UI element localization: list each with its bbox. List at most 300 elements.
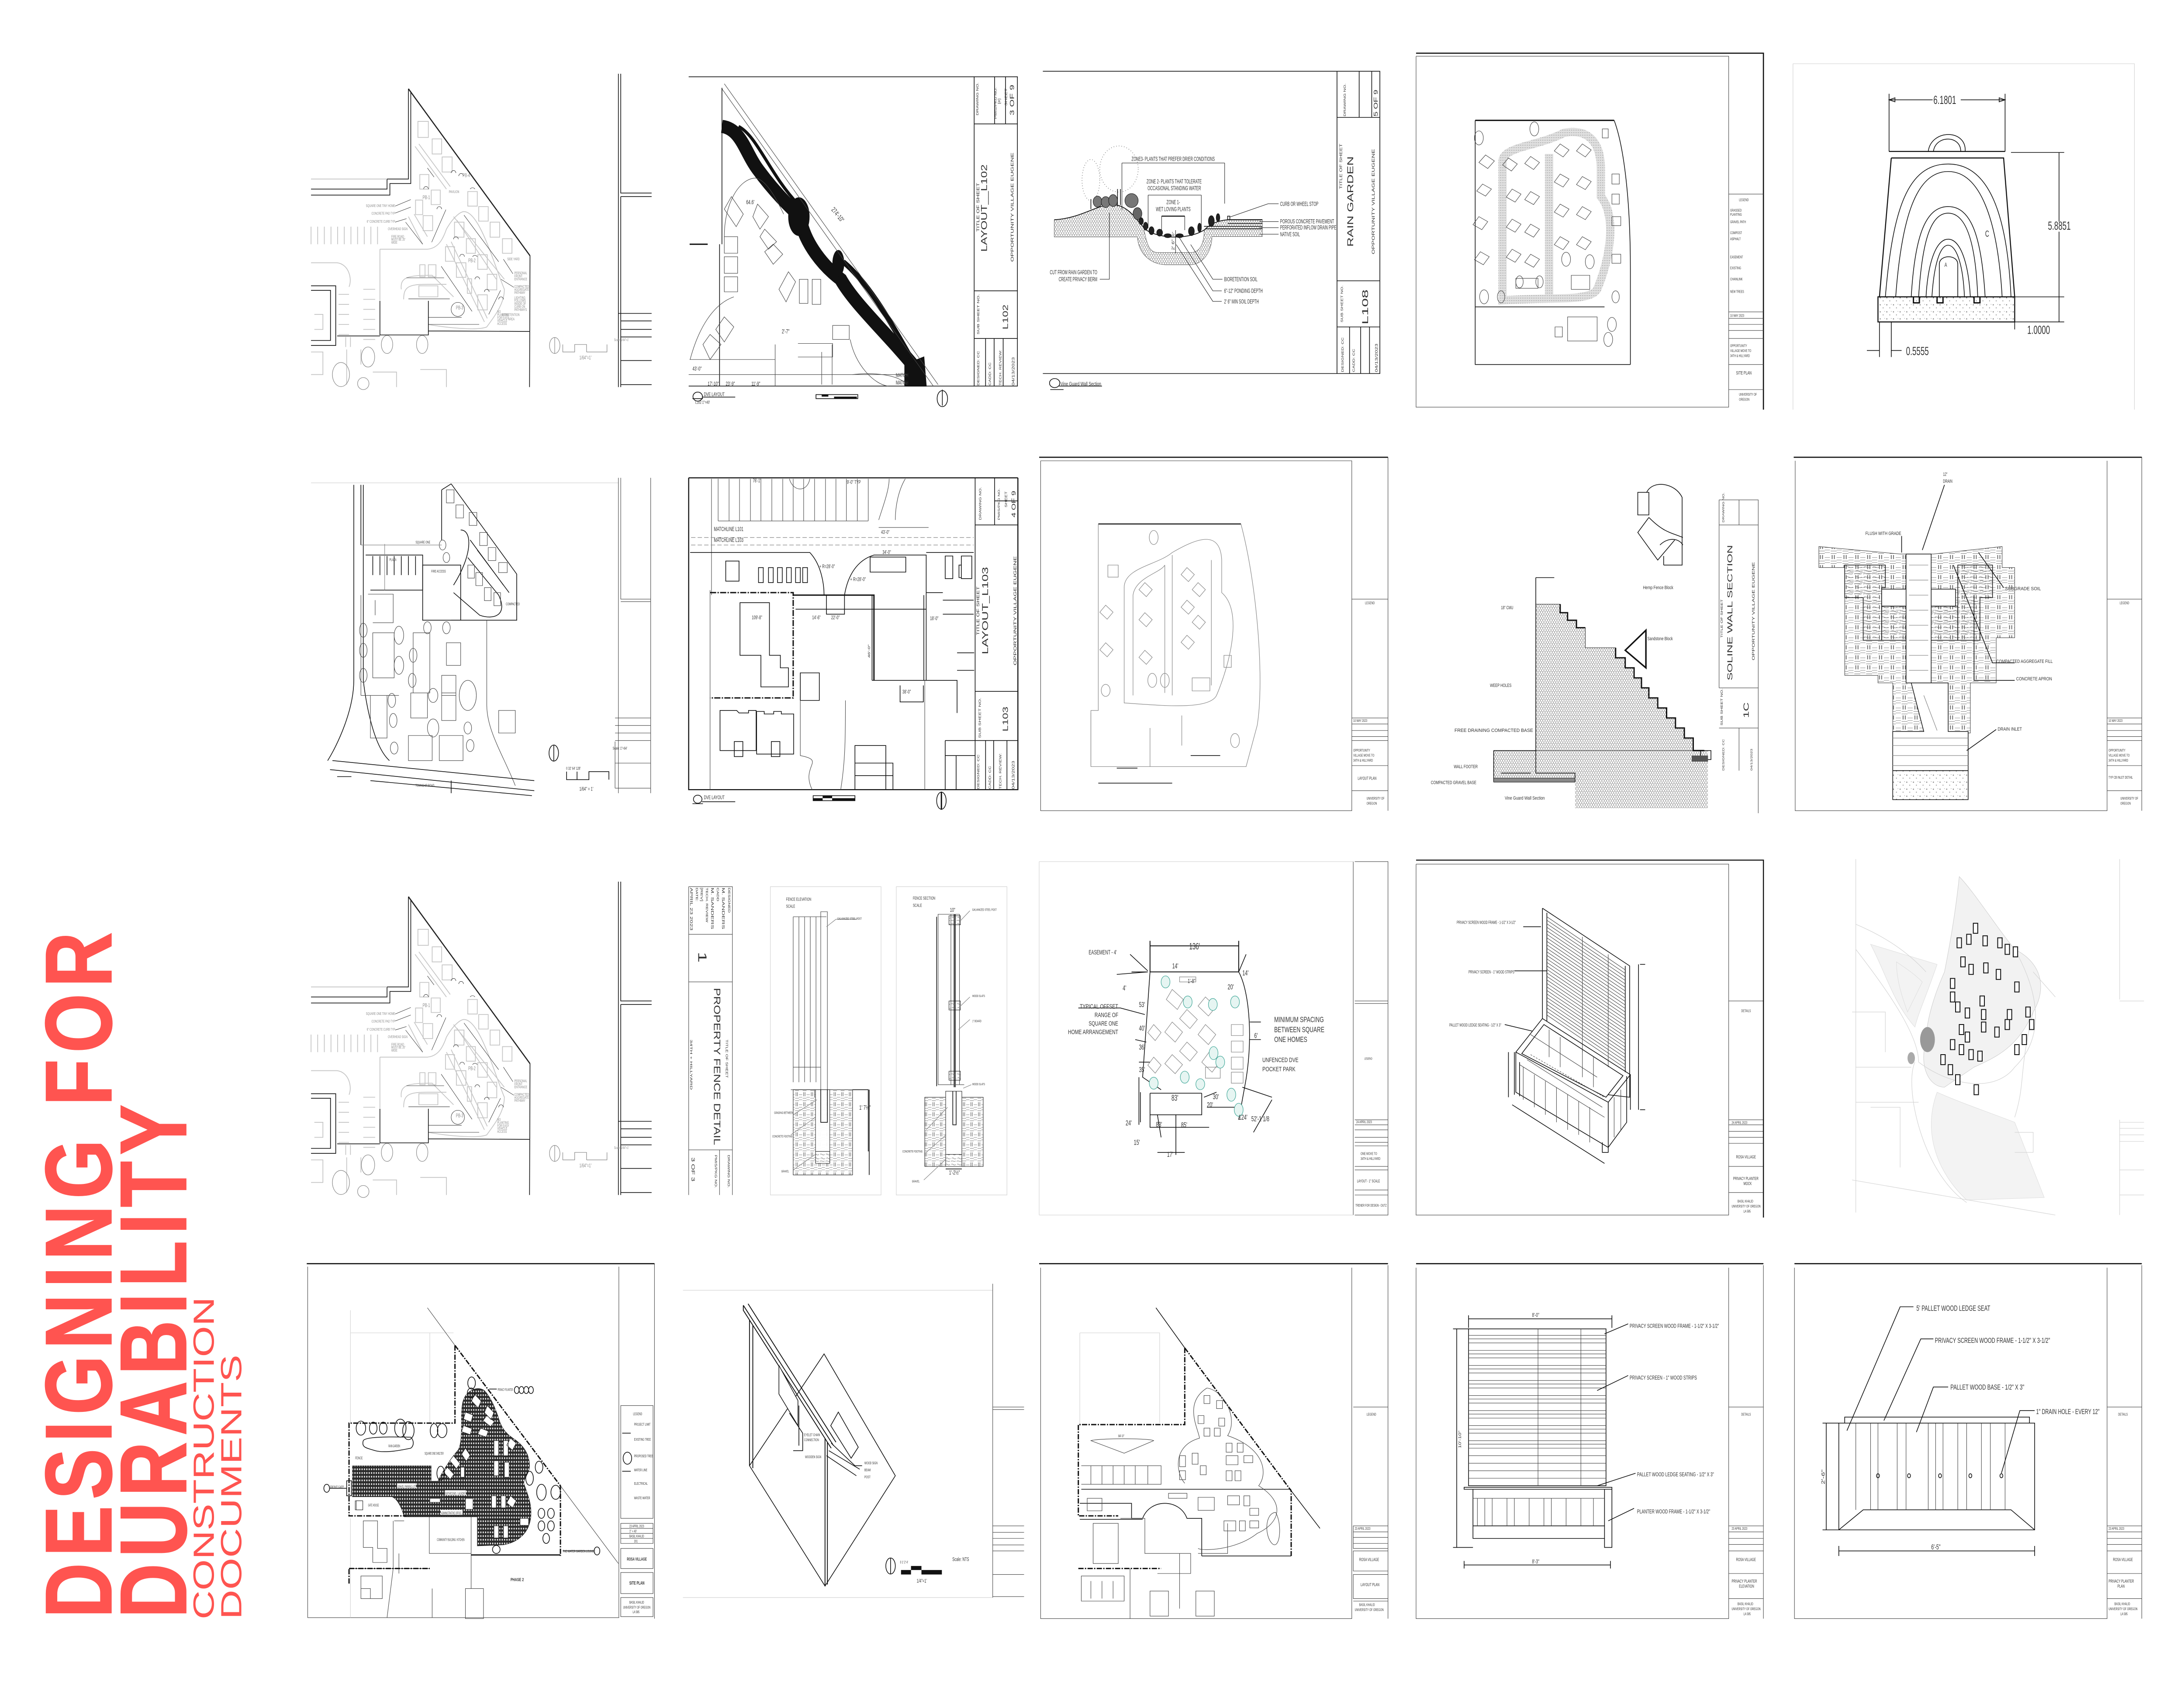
labels: PROJECT LIMIT [634,1423,650,1427]
site plan labels: PB-4 [463,173,470,179]
legend and title block [1730,198,1757,402]
text: PMIS/PKG NO. [997,488,1001,520]
parking and matchlines [718,479,868,521]
labels: SITE PLAN [629,1580,645,1586]
title block text: 34TH & HILLYARD [1353,759,1373,762]
labels: PRIVACY PLANTER [498,1388,513,1392]
site plan labels: PLANTING [497,1121,509,1125]
leaders [1902,485,2015,751]
annotations: L108 [1361,290,1370,324]
annotations: TITLE OF SHEET [1720,599,1724,638]
labels: WATER LINE [634,1469,647,1472]
sheet frame [1040,1265,1388,1618]
title block text: [REV] [700,888,703,901]
dimension labels: 53' [1139,1001,1145,1009]
annotations [1050,83,1379,387]
title block text: 34TH + HILLYARD [689,1040,693,1090]
site plan labels: FRONT [515,1082,522,1086]
site plan labels [366,173,629,361]
legend and title block: 10 MAY 2023 [1730,314,1744,318]
isometric block detail [1638,484,1683,565]
fence annotations: GALVANIZED STEEL POST [972,909,997,912]
title block text: 3 OF 3 [690,1157,696,1181]
fence elevation [771,887,881,1195]
annotations: POROUS CONCRETE PAVEMENT [1280,218,1334,225]
labels [804,1434,969,1584]
labels [1118,1412,1384,1612]
fence annotations: GRADING BETWEEN [774,1112,793,1115]
site plan labels: ENTRANCE [515,277,527,281]
dimension labels: UNFENCED DVE [1262,1056,1299,1064]
fence annotations: WOOD SLATS [972,1083,985,1086]
annotations: ROSA VILLAGE [2113,1557,2133,1562]
annotations: 8'-3" [1532,1559,1539,1565]
annotations: Vine Guard Wall Section [1061,381,1101,387]
stepped edge and wall footing [1560,604,1704,751]
privacy screen [1542,908,1630,1097]
annotations: 23 APRIL 2023 [1731,1527,1747,1531]
site plan labels: ACCESS [497,1130,507,1134]
site plan labels: FOR EASY [497,1124,509,1128]
annotations: 6'-5" [1931,1543,1941,1552]
annotations: CREATE PRIVACY BERM [1059,276,1097,283]
site plan labels: 6" CONCRETE CURB TYP [367,1028,395,1032]
fence annotations: GALVANIZED STEEL POST [837,918,862,921]
title block text: UNIVERSITY OF [1367,797,1385,801]
dimension labels: MINIMUM SPACING [1274,1015,1324,1024]
title block text: 64.6' [746,199,754,206]
labels: 23 APRIL 2023 [1355,1527,1370,1531]
subtitle line 1: CONSTRUCTION [188,1297,220,1619]
fence annotations: 1'-2½" [949,1169,960,1176]
site plan labels: INSIDE OF [515,302,526,306]
legend and title block: OPPORTUNITY [1730,344,1747,348]
scale and north arrow [549,745,609,780]
text: MATCHLINE L103 [714,537,743,544]
panel: catch basin section [1794,457,2142,811]
annotations: Vine Guard Wall Section [1505,796,1545,801]
text: 18'-0" [930,616,939,622]
labels: 1" = 40' [629,1530,637,1533]
labels: BEAM [864,1469,871,1472]
annotations: SUB SHEET NO. [1720,689,1724,725]
dimension labels: SQUARE ONE [1089,1020,1118,1027]
annotations: COMPACTED GRAVEL BASE [1431,780,1476,785]
text: 46'-0" [867,644,871,658]
site plan labels: WIDE [391,1049,397,1052]
soil section [1819,546,2015,800]
title block text: DESIGNED [727,888,731,913]
title block text: 23'-9" [726,381,735,387]
labels: ROSA VILLAGE [1359,1557,1379,1562]
title block text: CADD [716,888,719,901]
site plan labels: OVERHEAD SIGN [388,227,408,231]
sheet frame and title block [689,77,1017,386]
sheet frame [1416,864,1763,1215]
dimension labels [1068,941,1387,1207]
fence annotations: SCALE [913,903,922,908]
labels: BASIL KHALID [629,1535,644,1539]
dimensions and leaders [1822,1307,2035,1556]
annotations: PRIVACY SCREEN - 1" WOOD STRIPS [1469,969,1514,974]
legend and title block: PLANTING [1730,213,1742,217]
text: CADD: CC [988,766,992,789]
annotations: DESIGNED: CC [1341,337,1344,372]
text: + R=28'-0" [819,564,835,569]
sheet frame [1040,457,1388,811]
dimension labels: 40' [1139,1024,1145,1033]
annotations: DETAILS [2118,1412,2128,1417]
labels: ROSA VILLAGE [627,1556,647,1562]
trees [1475,122,1619,346]
site plan labels [366,1003,629,1169]
shelters [1941,923,2034,1095]
dimension values: 1.0000 [2027,324,2050,337]
legend and title block: OREGON [1739,397,1749,402]
labels: WOOD SIGN [864,1462,878,1465]
dimension labels: 24' [1126,1119,1132,1128]
fence annotations: CONCRETE FOOTING [772,1135,793,1138]
dimension labels: 14' [1242,969,1248,977]
heading line 1: DESIGNING FOR [26,926,131,1618]
dimension labels: 4' [1123,984,1126,993]
legend and title block: UNIVERSITY OF [1739,393,1757,397]
tiny homes cluster [1148,977,1243,1083]
site plan labels: PATHWAY [515,1099,525,1103]
site plan labels: Scale: 1/64"=1' [614,1146,629,1150]
site plan labels: CONCRETE PAD TYP [372,211,395,216]
labels: UNIVERSITY OF OREGON [1355,1608,1384,1612]
annotations: BASIL KHALID [1738,1602,1753,1606]
labels: COMPACTED [506,603,520,606]
title block text: DRAWING NO. [727,1155,730,1188]
site plan labels: COMPACTED [515,1093,529,1097]
annotations: OCCASIONAL STANDING WATER [1147,185,1201,192]
boundary and shelters [1475,120,1614,121]
labels: 84'-0" [1118,1434,1124,1438]
site plan labels: 1/64"=1' [580,355,591,361]
labels: WASTE WATER [634,1497,650,1501]
annotations: COMPACTED AGGREGATE FILL [1996,659,2053,664]
fence annotations: CONCRETE FOOTING [902,1150,923,1153]
dimension labels: 36' [1139,1043,1145,1052]
soil section [1054,204,1262,265]
site plan labels: CONCRETE PAD TYP [372,1019,395,1024]
annotations: DETAILS [1741,1009,1751,1013]
labels: BASIL KHALID [1359,1603,1375,1607]
sheet frame [1795,457,2142,811]
labels: 201 [634,1540,638,1543]
dimension labels: 14' [1172,962,1178,970]
dimension values: A [1945,262,1947,268]
site plan labels: COMPACTED [515,285,529,289]
annotations: VILLAGE MOVE TO [2108,753,2130,758]
legend and title block: 34TH & HILLYARD [1730,354,1750,358]
title block text: MATCH [896,380,908,386]
text: DVE LAYOUT [704,795,725,801]
fence annotations: FENCE SECTION [913,896,935,901]
dimension labels: 30' [1213,1093,1219,1101]
annotations: BIORETENTION SOIL [1224,276,1258,283]
scale bar and north arrow [692,390,947,407]
panel: site plan sheet row 2 column 1 [311,478,651,796]
site plan labels: FOR EASY [497,316,509,320]
labels: PLAZA [390,559,397,562]
site plan outline [1091,524,1260,783]
annotations: PRIVACY PLANTER [1733,1176,1759,1181]
site plan labels: PB-3 [456,1113,463,1119]
annotations: 04/13/2023 [1750,749,1753,771]
dimension labels: EASEMENT - 4' [1089,949,1117,956]
annotations [1431,493,1755,801]
panel: layout plan dark sheet [1039,1264,1388,1618]
annotations: 8'-0" [1532,1312,1539,1318]
sheet frame [1416,56,1729,407]
labels: FRONT GATE [330,1486,344,1489]
title block text: 274'-10" [830,205,846,224]
homes and building outline [1081,1439,1161,1484]
overall site linework [311,483,619,796]
labels: BATHROOMS / LAUNDRY [446,1492,466,1496]
context linework [350,1310,453,1618]
site plan labels: SIDE YARD [507,257,520,261]
dimension labels: 6' [1254,1032,1258,1040]
panel: site plan sheet row 3 column 1 [311,882,652,1197]
site plan labels: PLANTING [497,313,509,317]
labels: LEGEND [633,1412,642,1416]
annotations: 2'-6" [1821,1470,1826,1484]
site plan labels: MUST BE 20' [391,1045,405,1050]
panel: wall section [1431,484,1758,813]
annotations: OPPORTUNITY [2108,749,2125,752]
title block text [689,888,731,1188]
legend and title block: CHAINLINK [1730,277,1743,281]
annotations: 04/13/2023 [1375,344,1379,372]
sheet frame and title block [1043,71,1380,373]
annotations: 18" CMU [1501,605,1513,610]
dimension labels: 24 APRIL 2023 [1356,1120,1372,1125]
dimension lines [1867,94,2064,357]
shelters on hatch [356,1394,529,1538]
labels: 1/64" = 1' [580,787,593,792]
annotations: 1C [1742,702,1750,718]
title block linework [615,478,651,793]
panel: arch raised bed dimensions [1793,64,2134,410]
dimension labels: 17' [1167,1151,1173,1159]
annotations: TITLE OF SHEET [1339,144,1343,189]
annotations: SUB SHEET NO. [1340,286,1344,322]
text: 22'-0" [831,615,840,621]
labels: FIRE ACCESS [431,570,446,574]
trees [356,1377,560,1553]
title block text: LEGEND [1365,601,1375,605]
site plan labels: SQUARE ONE TINY HOME [366,204,395,208]
fence annotations: 10" [950,907,955,913]
legend and title block: EXISTING [1730,266,1741,270]
annotations: 6" [1172,232,1175,236]
site plan labels: PATHWAYS [515,308,527,312]
title block text: LAYOUT__L102 [980,164,989,252]
text: 43'-0" [881,530,890,535]
annotations: LEGEND [2120,601,2129,605]
title block text: OPPORTUNITY [1353,749,1370,752]
faint frame and title block [683,1290,993,1597]
annotations: ELEVATION [1739,1584,1754,1589]
annotations: DETAILS [1741,1412,1751,1417]
title block text: 43'-0" [692,366,702,372]
annotations: PALLET WOOD LEDGE SEATING - 1/2" X 3" [1637,1472,1714,1478]
annotations: DRAWING NO. [1721,493,1725,522]
fence annotations: 1' 7½" [859,1104,871,1111]
annotations: UNIVERSITY OF [2120,797,2139,801]
site plan labels: WIDE [391,241,397,245]
legend and title block: ASPHALT [1730,237,1741,241]
text: TECH. REVIEW: [999,753,1002,789]
panel: privacy planter elevation [1416,1264,1763,1618]
annotations: MOCK [1743,1181,1752,1186]
panel: sign isometric [683,1284,1024,1597]
labels: GRAVEL PARKING LOT [397,1485,416,1489]
panel: layout sheet with easement dimensions [1039,862,1388,1215]
annotations: PRIVACY SCREEN - 1" WOOD STRIPS [1630,1375,1697,1381]
legend and title block: EASEMENT [1730,255,1743,259]
title block text: VILLAGE MOVE TO [1353,753,1375,758]
dimension labels: 20' [1207,1101,1213,1109]
dimension values: 5.8851 [2048,219,2071,232]
annotations [1458,1312,1761,1616]
legend and title block: VILLAGE MOVE TO [1730,349,1752,353]
sheet lines [1856,859,2144,1215]
dimension values: 0.5555 [1906,345,1929,358]
context [1080,1333,1160,1425]
labels: Scale: 1"=64' [613,746,627,751]
labels: Scale: NTS [952,1557,969,1563]
panel: site plan sheet with legend [1416,53,1763,410]
title block text: 10 MAY 2023 [1353,719,1367,723]
title block text: TECH. REVIEW [705,888,708,922]
hatched pathways [352,1388,531,1546]
buildings [726,556,974,702]
panel: layout plan faint sheet [1039,457,1388,811]
text: OPPORTUNITY VILLAGE EUGENE [1013,556,1017,666]
sheet frame [308,1264,654,1618]
text: 4 OF 9 [1011,491,1017,517]
annotations: DRAWING NO. [1343,83,1347,116]
fence section [896,887,1007,1195]
dimension values [1906,93,2071,358]
labels: UNIVERSITY OF OREGON [623,1606,650,1610]
teal trees [1149,976,1243,1116]
annotations: PRIVACY SCREEN WOOD FRAME - 1-1/2" X 3-1/2" [1630,1323,1719,1329]
annotations: ROSA VILLAGE [1736,1557,1756,1562]
title block text: LAYOUT PLAN [1358,776,1376,781]
site plan labels: FIRE ROAD [391,1042,404,1047]
dimension values: 6.1801 [1933,93,1956,107]
site plan labels: NO [497,1118,501,1122]
labels: PHASE 2 [511,1577,524,1582]
scale and north arrow [886,1558,942,1574]
site plan labels: OVERHEAD SIGN [388,1035,408,1039]
annotations: LA 585 [1743,1209,1751,1214]
panel: site plan sheet row 1 column 1 [311,74,652,390]
site plan labels: PAVILION [449,190,459,194]
annotations: CUT FROM RAIN GARDEN TO [1050,269,1097,276]
annotations: PERFORATED INFLOW DRAIN PIPE [1280,224,1336,231]
title block text: 3 OF 9 [1009,85,1016,115]
site plan labels: PERSONAL [515,271,527,275]
annotations: PRIVACY SCREEN WOOD FRAME - 1-1/2" X 3-1/2" [1935,1337,2050,1345]
panel: layout L103 [689,478,1018,810]
river band linework [722,126,926,386]
fence annotations: 1" BOARD [972,1020,981,1023]
site plan labels: VEHICLE [497,1127,508,1131]
title block text: TECH. REVIEW: [999,350,1002,386]
annotations: 24 APRIL 2023 [1731,1121,1747,1125]
legend and title block: GRASSED [1730,208,1742,213]
text: TITLE OF SHEET [976,586,980,635]
annotations: DRAIN INLET [1997,726,2022,731]
title: Designing for Durability [26,926,248,1619]
heading line 2: DURABILITY [100,1098,206,1618]
title block text: M. SANDERS [721,888,725,929]
text: 38'-0" [902,689,911,695]
title block text: SUB SHEET NO. [977,294,980,335]
title block text: PROPERTY FENCE DETAIL [712,988,722,1145]
title block text: DVE LAYOUT [704,392,725,398]
site plan labels: CURB ON [515,305,525,309]
title block text: DRAWING NO. [976,83,979,115]
panel: privacy planter isometric [1416,860,1763,1218]
legend and title block: SITE PLAN [1736,370,1752,376]
dimension labels: LEGEND [1364,1058,1372,1061]
annotations: 5 OF 9 [1373,90,1379,116]
annotations: PALLET WOOD BASE - 1/2" X 3" [1950,1383,2024,1392]
annotations: UNIVERSITY OF OREGON [1731,1607,1761,1611]
dimension labels: BETWEEN SQUARE [1274,1025,1324,1034]
annotations: 2' 6" MIN SOIL DEPTH [1224,298,1259,305]
dimension labels: LAYOUT - 1" SCALE [1357,1179,1380,1183]
sheet frame [1794,1265,2142,1618]
text: DESIGNED: CC [977,754,980,789]
site plan labels: PB-3 [456,305,463,311]
fence annotations: GRAVEL [781,1170,789,1173]
annotations: FLUSH WITH GRADE [1866,531,1901,536]
dimension labels: 85' [1181,1121,1187,1129]
title block text: PMIS/PKG NO. [994,87,997,119]
dimension labels: 83' [1171,1094,1178,1103]
dimension labels: POCKET PARK [1262,1066,1296,1073]
site plan labels: PB-1 [423,1003,430,1008]
site plan labels: PERSONAL [515,1079,527,1083]
annotations: PALLET WOOD LEDGE SEATING - 1/2" X 3" [1449,1022,1501,1028]
text: 109'-8" [752,615,762,621]
annotations: 12" [1943,472,1947,477]
annotations: PRIVACY PLANTER [2108,1578,2134,1584]
grey landscape [1924,876,2041,1087]
title block text: DESIGNED: CC [977,351,980,386]
title block text: TITLE OF SHEET [725,1040,729,1078]
annotations: SUBGRADE SOIL [2005,586,2041,591]
text: + R=28'-0" [850,577,866,583]
title block [1719,500,1758,813]
title block text: DATE: [695,888,698,901]
labels: ADMINISTRATIVE OFFICE [441,1512,462,1515]
title block text: CADD: CC [988,362,992,386]
beam and posts [743,1304,836,1586]
title block text: [#] [998,99,1001,104]
dimension labels: HOME ARRANGEMENT [1068,1028,1118,1035]
dimension labels: ONE MOVE TO [1361,1152,1377,1156]
